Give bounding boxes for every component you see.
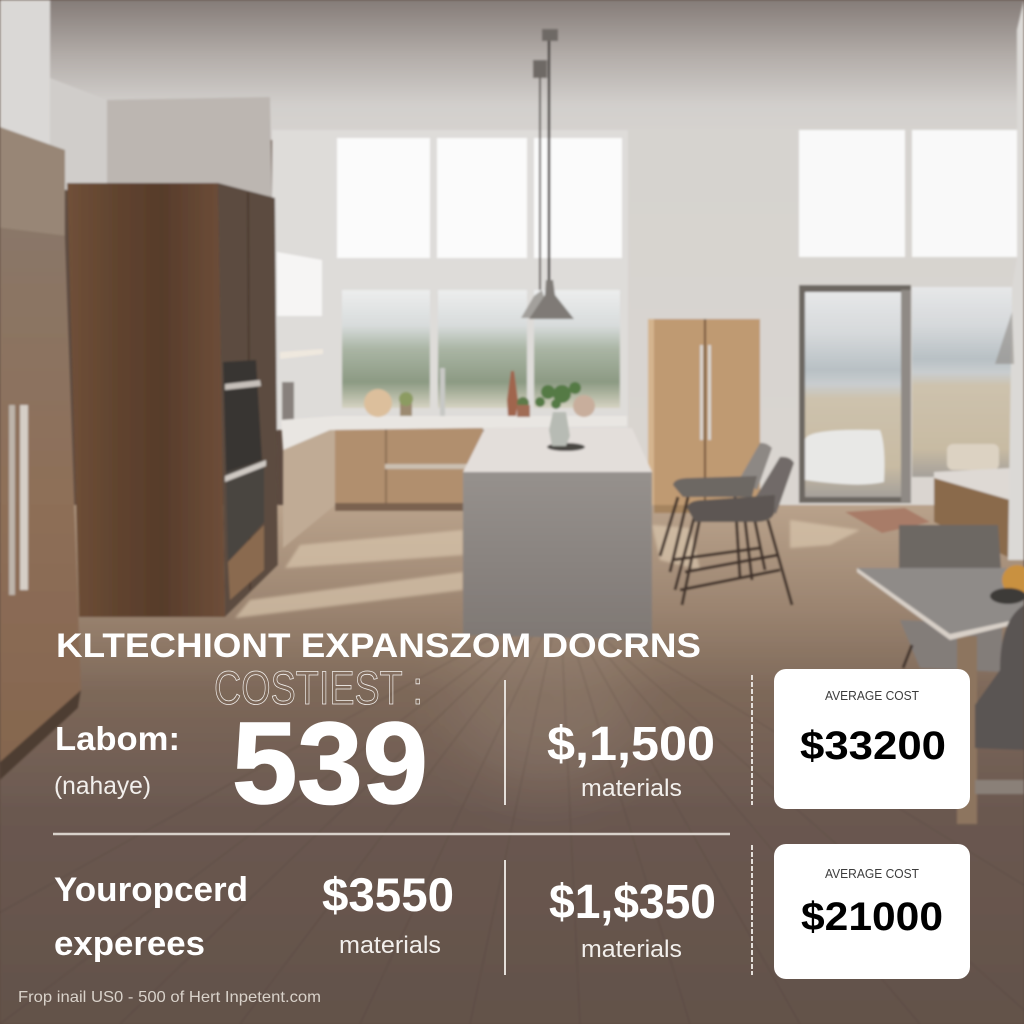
wall ovens — [223, 360, 266, 600]
card value: $33200 — [800, 724, 946, 768]
dining table and chairs — [857, 525, 1024, 824]
expenses label line 2: experees — [54, 925, 205, 963]
back wall — [272, 130, 632, 430]
materials amount: $,1,500 — [547, 718, 715, 771]
expenses label line 1: Youropcerd — [54, 871, 248, 909]
big number: 539 — [232, 698, 428, 828]
island — [463, 428, 652, 640]
dashed divider — [751, 845, 753, 975]
horizontal divider — [53, 833, 730, 835]
white upper cabinet and shelf — [277, 252, 323, 420]
wood wardrobe — [648, 319, 760, 513]
row 2: your expenses — [54, 845, 752, 975]
floor — [0, 505, 1024, 1024]
labor note: (nahaye) — [54, 772, 151, 800]
upper right windows — [799, 130, 1017, 257]
right wall — [628, 128, 1024, 518]
card: average cost 1 — [774, 669, 970, 809]
tall wood cabinet — [67, 183, 278, 617]
pendant lights — [521, 29, 574, 319]
divider — [504, 680, 506, 805]
lower windows with landscape — [342, 290, 620, 408]
labor label: Labom: — [55, 720, 180, 757]
card label: AVERAGE COST — [825, 867, 919, 881]
floor sheen — [455, 610, 635, 790]
left fridge — [0, 127, 81, 780]
subtitle outlined: COSTIEST : — [214, 661, 423, 714]
second amount: $1,$350 — [549, 876, 716, 929]
amount label: materials — [339, 932, 441, 959]
ceiling — [0, 0, 1024, 140]
second amount label: materials — [581, 936, 682, 963]
bar stools — [660, 443, 794, 605]
floor planks — [0, 600, 1024, 1024]
upper left wall — [0, 0, 50, 160]
clerestory windows — [337, 138, 622, 258]
sliding door and view — [799, 285, 1012, 503]
card value: $21000 — [801, 895, 943, 939]
wire pendant — [995, 312, 1014, 364]
sunlight on floor — [235, 520, 860, 618]
card: average cost 2 — [774, 844, 970, 979]
footer note: Frop inail US0 - 500 of Hert Inpetent.com — [18, 989, 321, 1006]
island vase with plant — [535, 382, 585, 451]
right desk and rug — [845, 468, 1010, 558]
materials label: materials — [581, 775, 682, 802]
window sill objects — [364, 368, 595, 417]
card label: AVERAGE COST — [825, 689, 919, 703]
title: KLTECHIONT EXPANSZOM DOCRNS — [56, 627, 701, 665]
base cabinets — [281, 416, 627, 548]
divider — [504, 860, 506, 975]
right pillar — [1008, 0, 1024, 560]
row 1: labor costs — [54, 675, 752, 828]
dashed divider — [751, 675, 753, 805]
soffit walls — [50, 78, 272, 197]
amount: $3550 — [322, 868, 454, 921]
